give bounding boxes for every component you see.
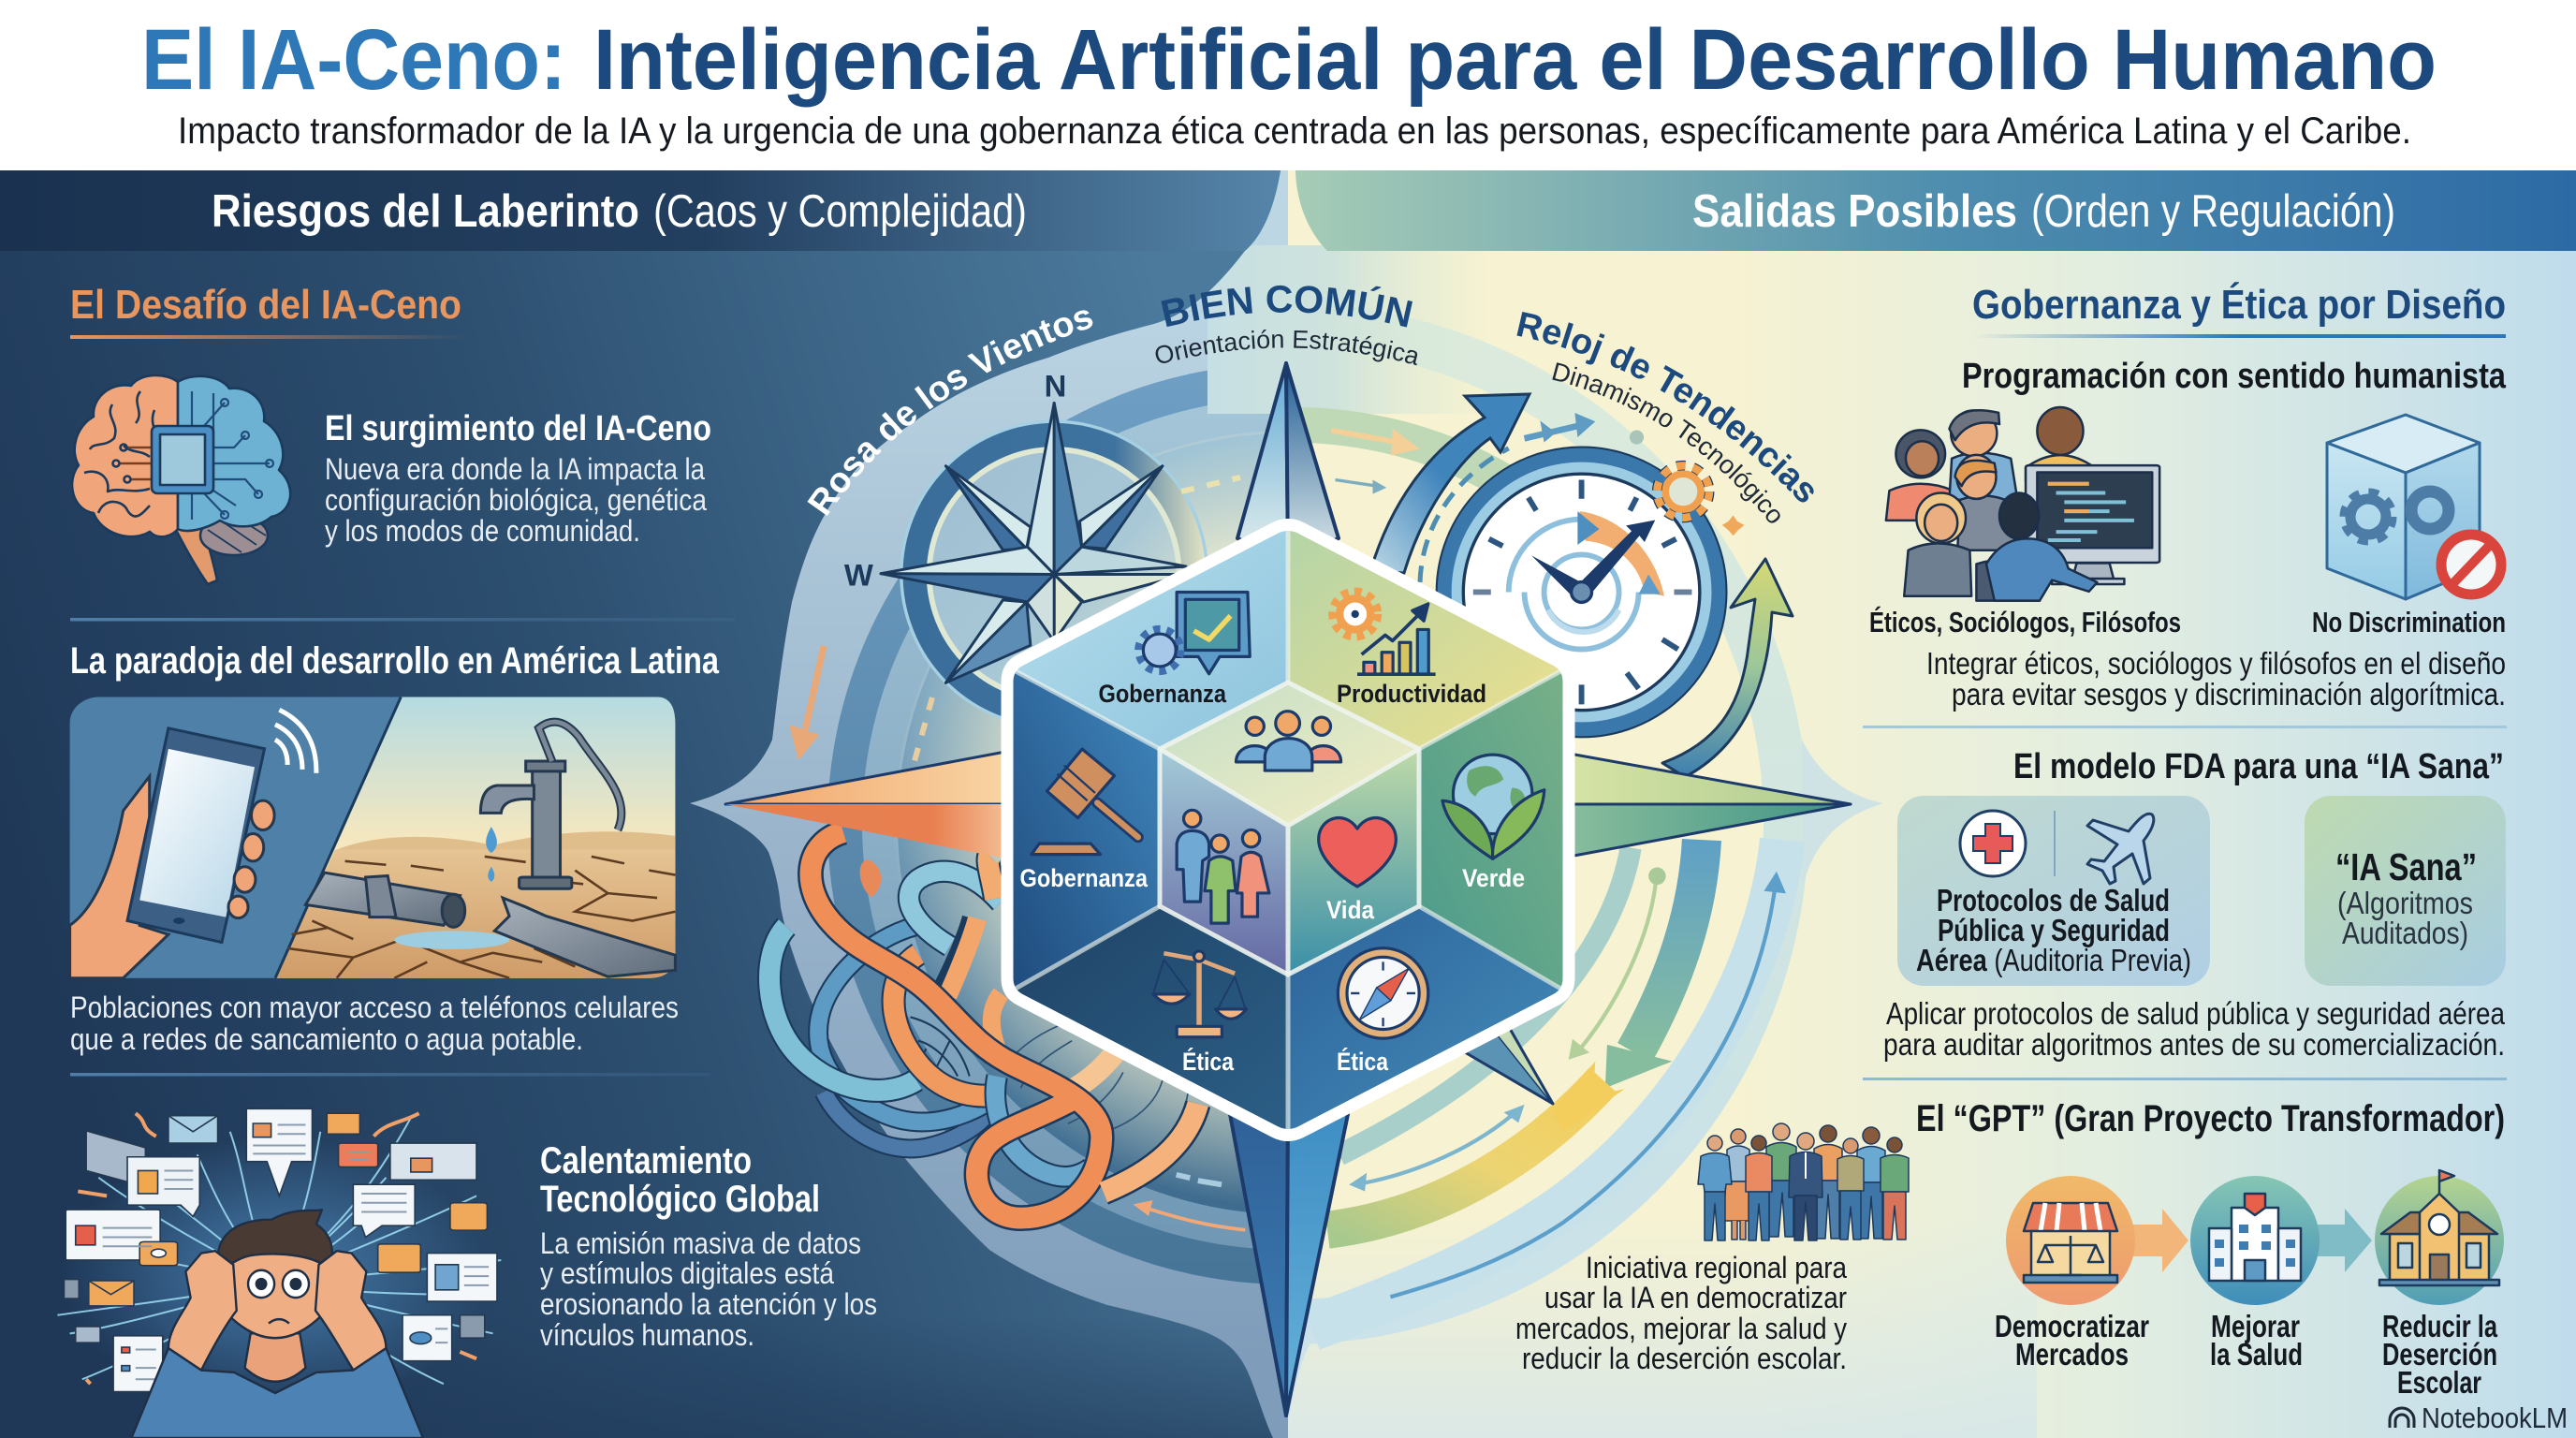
text block: calentamiento: Calentamiento [540, 1140, 752, 1181]
left panel heading: El Desafío del IA-Ceno [70, 282, 461, 328]
right lens: concentric bands [1288, 313, 2037, 1438]
left lens: concentric bands [690, 170, 1288, 1438]
background: white title band [0, 0, 2576, 170]
text: poblaciones: Poblaciones con mayor acceso a teléfonos celulares [70, 990, 679, 1024]
small arrows on left lens [789, 477, 1240, 768]
text: iniciativa: Iniciativa regional para [1586, 1251, 1847, 1284]
text block: calentamiento: Tecnológico Global [540, 1179, 820, 1220]
illustration: crowd [1698, 1123, 1909, 1240]
soft fade at top of centre [1208, 245, 1488, 414]
cell: right [1419, 667, 1569, 993]
text: aplicar [1883, 996, 2506, 1062]
icon: scales [1153, 951, 1247, 1037]
cell: bottom left [1007, 906, 1288, 1138]
icon: productivity gear and chart [1334, 593, 1436, 674]
hexagon labels: Productividad [1337, 680, 1486, 708]
illustration: team at computer [1886, 407, 2159, 601]
circle labels: Reducir la [2382, 1309, 2497, 1343]
icon: medical cross [1960, 811, 2026, 876]
labels: Bien Común: BIEN COMÚN [1161, 285, 1412, 328]
card: IA Sana: “IA Sana” [2335, 845, 2477, 888]
text block: calentamiento [540, 1140, 877, 1352]
arrow: big blue rising arrow [1370, 394, 1530, 573]
icon: governance gear and screen [1140, 593, 1250, 674]
icon: heart [1319, 818, 1396, 887]
card: protocolos: Aérea (Auditoria Previa) [1916, 943, 2191, 977]
cell: inner top [1160, 682, 1419, 826]
cell: inner right [1288, 749, 1419, 975]
circle labels [1995, 1309, 2497, 1400]
hexagon labels: Ética [1182, 1047, 1235, 1076]
flow arrow 2 [2316, 1209, 2372, 1272]
card: IA Sana: Auditados) [2342, 916, 2468, 950]
illustration: glass cube with no-discrimination sign [2327, 415, 2501, 599]
central hexagon [1007, 521, 1569, 1138]
hexagon labels: Gobernanza [1099, 680, 1227, 708]
flow arrow 1 [2132, 1209, 2188, 1272]
card: protocolos: Protocolos de Salud [1937, 883, 2170, 917]
left dark panel background [0, 170, 1281, 1438]
text block: surgimiento: El surgimiento del IA-Ceno [325, 409, 711, 448]
text block: calentamiento: y estímulos digitales está [540, 1256, 834, 1290]
card: IA Sana: (Algoritmos [2337, 886, 2473, 920]
text block: surgimiento [325, 409, 711, 548]
circle labels: Mejorar [2211, 1309, 2300, 1343]
circle labels: Democratizar [1995, 1309, 2149, 1343]
hexagon labels: Gobernanza [1020, 864, 1149, 892]
text: poblaciones [70, 990, 679, 1056]
background: light right side [1217, 170, 2576, 1438]
captions: team and cube [1869, 606, 2506, 638]
title: Inteligencia Artificial para el Desarrollo Humano [593, 12, 2437, 108]
front people [1904, 543, 1971, 596]
big star: east point, green [1554, 751, 1851, 859]
tangled knot of ropes [769, 832, 1245, 1230]
cell dividers [1007, 521, 1569, 1138]
icon: brain with chip [72, 375, 290, 584]
hexagon labels: Verde [1462, 864, 1525, 892]
arrow: green rising arrow [1662, 559, 1793, 777]
cell: inner left [1160, 749, 1288, 975]
heading: paradoja: La paradoja del desarrollo en América Latina [70, 640, 720, 682]
icon: people group [1237, 712, 1341, 770]
icon: globe with leaves [1442, 755, 1544, 858]
hexagon labels: Vida [1326, 896, 1375, 924]
header band left [0, 170, 1281, 251]
captions: team and cube: No Discrimination [2312, 606, 2506, 638]
icon: airplane [2087, 814, 2154, 884]
hexagon white frame [1007, 524, 1569, 1135]
card: protocolos: Pública y Seguridad [1938, 913, 2170, 947]
cell: top left [1007, 521, 1288, 749]
illustration: phone vs broken water pipe [70, 697, 675, 978]
header band right [1295, 170, 2576, 251]
labels: Bien Común: Orientación Estratégica [1155, 330, 1417, 365]
circle labels: Mercados [2015, 1337, 2129, 1372]
big star: west point, orange [725, 749, 1020, 861]
big star: north point [1237, 363, 1339, 562]
wifi [275, 710, 316, 773]
illustration: overwhelmed person with digital stimuli [57, 1108, 501, 1438]
hexagon labels: Ética [1337, 1047, 1389, 1076]
icon: clock (Reloj de Tendencias) [1437, 448, 1744, 737]
labels: Bien Común [1155, 285, 1417, 365]
text block: surgimiento: y los modos de comunidad. [325, 514, 640, 548]
title: El IA-Ceno: [141, 12, 566, 108]
cell: left [1007, 667, 1160, 993]
subtitle: Impacto transformador de la IA y la urgencia de una gobernanza ética centrada en las personas, específicamente para América Latina y el Caribe. [178, 110, 2411, 152]
header band left: (Caos y Complejidad) [653, 186, 1027, 237]
monitor [2026, 465, 2159, 563]
bands and arrows: right upper [1288, 413, 1644, 582]
text block: surgimiento: Nueva era donde la IA impacta la [325, 452, 705, 486]
circle: reducir desercion escolar [2375, 1170, 2504, 1305]
text: iniciativa: mercados, mejorar la salud y [1515, 1312, 1847, 1345]
text: iniciativa: reducir la deserción escolar. [1522, 1342, 1847, 1375]
bands and arrows: right lower [1311, 840, 1786, 1328]
circle labels: Escolar [2397, 1365, 2481, 1400]
text: iniciativa: usar la IA en democratizar [1544, 1281, 1847, 1314]
circle labels: la Salud [2210, 1337, 2303, 1372]
cell: top right [1288, 521, 1569, 749]
text: poblaciones: que a redes de sancamiento o agua potable. [70, 1022, 583, 1056]
header band left: Riesgos del Laberinto [212, 186, 639, 237]
cell: bottom right [1288, 906, 1569, 1138]
text block: calentamiento: vínculos humanos. [540, 1318, 754, 1352]
clock gear [1657, 465, 1709, 518]
right panel heading: Gobernanza y Ética por Diseño [1972, 281, 2506, 328]
hexagon labels [1020, 680, 1525, 1076]
band stripes under hexagon lower left [991, 993, 1188, 1175]
labels: Reloj de Tendencias: Reloj de Tendencias [1516, 312, 1814, 502]
water puddle [394, 931, 509, 949]
text block: surgimiento: configuración biológica, genética [325, 483, 707, 517]
water pump [533, 763, 561, 877]
circle labels: Deserción [2382, 1337, 2497, 1372]
text block: calentamiento: La emisión masiva de datos [540, 1226, 861, 1260]
icon: navigation compass [1338, 948, 1428, 1038]
icon: family [1177, 810, 1269, 923]
captions: team and cube: Éticos, Sociólogos, Filósofos [1869, 606, 2181, 638]
hand holding phone [70, 776, 168, 978]
header band right: (Orden y Regulación) [2031, 186, 2395, 237]
text block: calentamiento: erosionando la atención y los [540, 1287, 877, 1321]
card: protocolos [1897, 796, 2210, 986]
hexagon icons [1032, 593, 1544, 1038]
circle: democratizar mercados [2006, 1176, 2135, 1305]
text: integrar [1926, 646, 2506, 712]
labels: Reloj de Tendencias: Dinamismo Tecnológico [1552, 362, 1780, 523]
card: IA Sana [2305, 796, 2506, 986]
compass letters: N [1045, 368, 1066, 403]
icon: compass rose (Rosa de los Vientos): W [844, 557, 873, 592]
cube gears [2348, 492, 2449, 537]
darkened lower edge [0, 1030, 1273, 1438]
circle: mejorar la salud [2190, 1176, 2320, 1305]
text: iniciativa [1515, 1251, 1847, 1375]
label: Rosa de los Vientos: Rosa de los Vientos [807, 310, 1093, 516]
broken pipes [305, 873, 460, 925]
big star: south point [1230, 1114, 1348, 1416]
icon: compass rose (Rosa de los Vientos) [844, 368, 1207, 727]
clock hands [1531, 520, 1655, 599]
icon: gavel [1032, 749, 1138, 855]
header band right: Salidas Posibles [1692, 186, 2017, 237]
small south-east star point [1465, 1027, 1553, 1104]
